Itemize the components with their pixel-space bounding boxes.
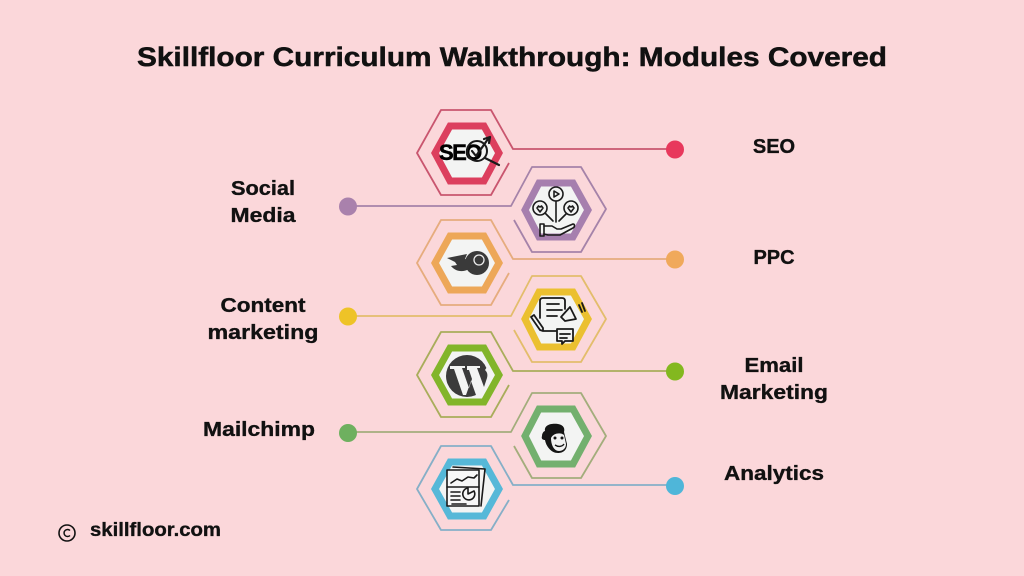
module: Content marketing <box>208 276 606 362</box>
hexagon: Content marketing <box>525 292 588 347</box>
dot: Mailchimp <box>339 424 357 442</box>
dot: Email Marketing <box>666 362 684 380</box>
icon: copyright <box>59 525 75 541</box>
label: SEO: SEO <box>753 136 795 158</box>
module: Email Marketing <box>417 332 828 417</box>
dot: Content marketing <box>339 308 357 326</box>
dot: Social Media <box>339 198 357 216</box>
label: PPC: PPC <box>753 247 795 269</box>
label: Email Marketing: Email <box>744 355 804 377</box>
dot: Analytics <box>666 477 684 495</box>
icon: SEO magnifier: SEO <box>439 140 482 165</box>
label line 2: Content marketing: marketing <box>208 322 318 344</box>
module: Mailchimp <box>203 393 606 478</box>
module: Social Media <box>230 167 606 252</box>
connector: Analytics <box>417 446 675 530</box>
footer: copyright <box>59 520 221 541</box>
module: PPC <box>417 220 795 305</box>
label: Content marketing: Content <box>220 295 306 317</box>
connector: SEO <box>417 110 675 195</box>
icon: WordPress <box>446 355 491 397</box>
hexagon: Email Marketing <box>435 348 499 402</box>
label: Social Media: Social <box>231 178 295 200</box>
hexagon: Mailchimp <box>525 409 588 464</box>
connector: Social Media <box>348 167 606 252</box>
icon: analytics report <box>447 467 485 506</box>
label: Mailchimp: Mailchimp <box>203 419 315 441</box>
text: website: skillfloor.com <box>90 520 221 541</box>
title: Skillfloor Curriculum Walkthrough: Modules Covered <box>137 42 887 72</box>
module: SEO <box>417 110 795 195</box>
hexagon: SEO <box>435 126 499 181</box>
connector: PPC <box>417 220 675 305</box>
icon: content document and megaphone <box>531 298 585 344</box>
label: Analytics: Analytics <box>724 463 824 485</box>
label line 2: Social Media: Media <box>230 205 296 227</box>
icon: Mailchimp monkey <box>542 424 567 453</box>
hexagon: PPC <box>435 236 499 290</box>
hexagon: Analytics <box>435 462 499 516</box>
dot: PPC <box>666 250 684 268</box>
connector: Email Marketing <box>417 332 675 417</box>
icon: comet <box>447 251 489 275</box>
label line 2: Email Marketing: Marketing <box>720 382 828 404</box>
module: Analytics <box>417 446 824 530</box>
hexagon: Social Media <box>525 183 588 237</box>
icon: SEO magnifier <box>439 137 499 165</box>
icon: social hand <box>533 187 578 236</box>
connector: Mailchimp <box>348 393 606 478</box>
dot: SEO <box>666 140 684 158</box>
connector: Content marketing <box>348 276 606 362</box>
